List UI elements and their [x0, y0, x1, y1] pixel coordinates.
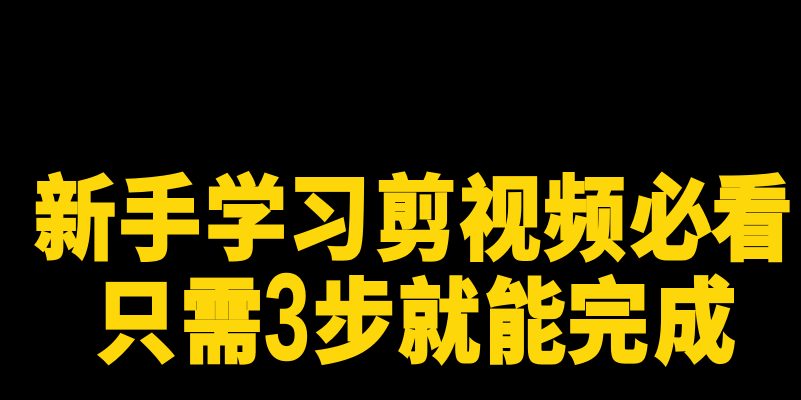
title line 2	[95, 248, 736, 386]
title line 1: 新手学习剪视频必看	[34, 147, 793, 279]
title line 2 text before digit: 只需	[95, 250, 263, 382]
digit 3: 3	[264, 248, 310, 386]
title line 2 text after digit: 步就能完成	[313, 250, 736, 382]
